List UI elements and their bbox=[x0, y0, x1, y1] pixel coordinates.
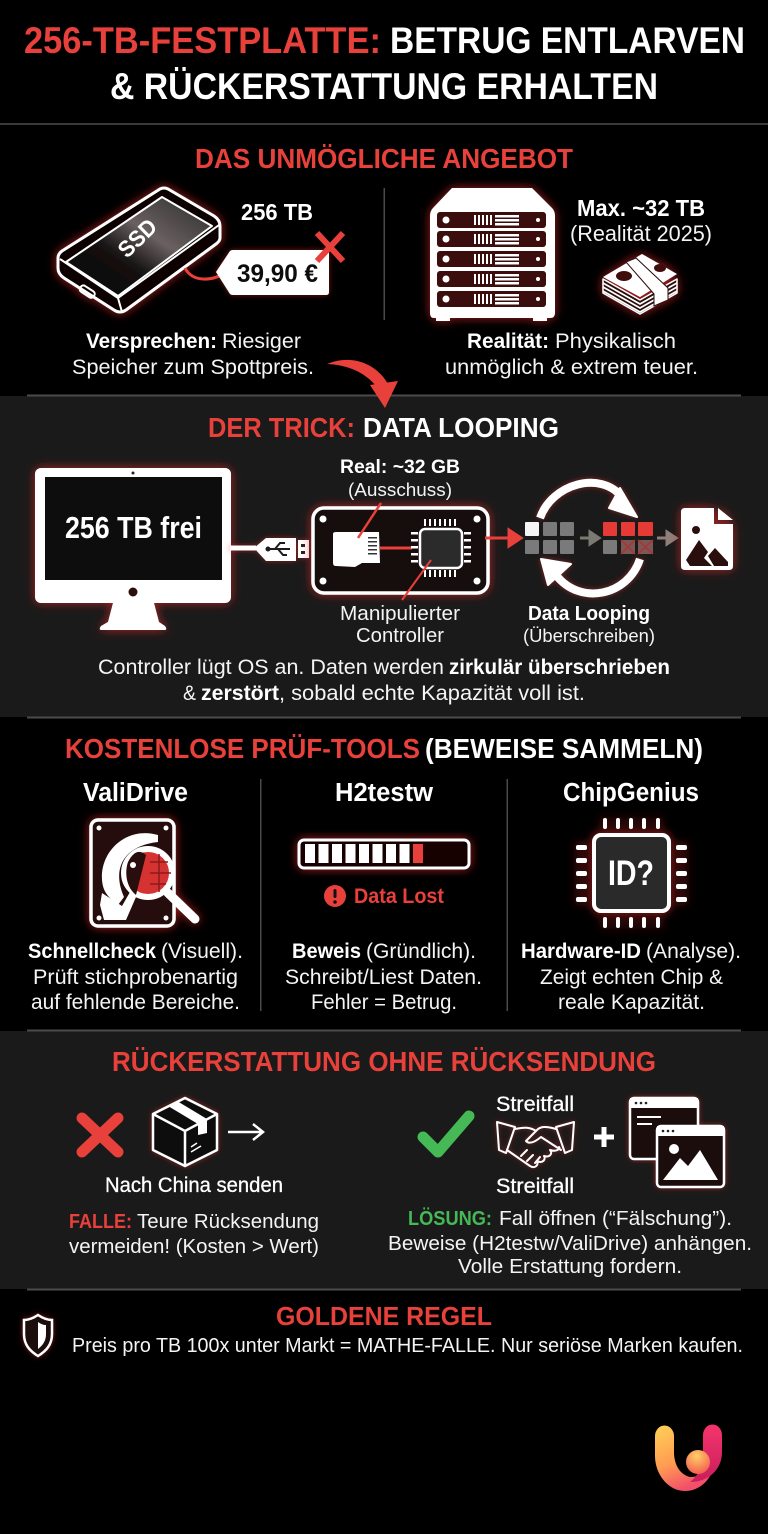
tool description: Schreibt/Liest Daten. bbox=[285, 965, 482, 989]
icon: USB plug bbox=[230, 538, 309, 561]
label: Data Looping: Data Looping bbox=[528, 602, 650, 625]
panel: das unmögliche Angebot bbox=[58, 143, 712, 379]
panel: Rückerstattung bbox=[0, 1030, 768, 1289]
label: ID: ID? bbox=[608, 854, 654, 893]
text: Falle bbox=[69, 1210, 319, 1258]
icon: chip with ID bbox=[576, 818, 687, 928]
price tag: 39,90 € bbox=[237, 260, 318, 288]
icon: SSD drive bbox=[58, 188, 220, 312]
heading: Prüf-Tools: (BEWEISE SAMMELN) bbox=[425, 733, 703, 764]
icon: warning bbox=[324, 885, 346, 907]
text: Lösung: Beweise (H2testw/ValiDrive) anhängen. bbox=[388, 1232, 752, 1255]
logo bbox=[655, 1424, 722, 1491]
text: explanation bbox=[98, 655, 670, 705]
tool: ChipGenius bbox=[521, 779, 741, 1014]
icon: monitor bbox=[35, 468, 231, 630]
title bbox=[24, 20, 745, 107]
data blocks: overwritten bbox=[603, 522, 653, 554]
label: Streitfall bottom: Streitfall bbox=[496, 1175, 574, 1198]
icon: SSD drive: SSD bbox=[112, 213, 162, 263]
text: Realität bbox=[445, 329, 698, 379]
tool description: Schnellcheck bbox=[28, 939, 156, 963]
tool description: (Gründlich). bbox=[366, 939, 476, 963]
label: manipulierter Controller: Controller bbox=[356, 624, 444, 647]
tool name: ValiDrive bbox=[83, 779, 188, 807]
red curved arrow bbox=[327, 360, 398, 408]
tool description: Hardware-ID bbox=[521, 939, 641, 963]
text: explanation: zerstört bbox=[201, 681, 279, 705]
label: Streitfall top: Streitfall bbox=[496, 1093, 574, 1116]
icon: corrupted image file bbox=[681, 508, 733, 570]
title: & RÜCKERSTATTUNG ERHALTEN bbox=[110, 66, 658, 107]
label: manipulierter Controller: Manipulierter bbox=[340, 602, 460, 625]
label: data lost: Data Lost bbox=[354, 884, 444, 908]
icon: plus bbox=[594, 1127, 614, 1147]
arrow: gray between blocks bbox=[580, 532, 599, 544]
text: Versprechen: Speicher zum Spottpreis. bbox=[72, 355, 314, 379]
heading: Rückerstattung: RÜCKERSTATTUNG OHNE RÜCKSENDUNG bbox=[112, 1046, 656, 1077]
tool description: (Visuell). bbox=[161, 939, 243, 963]
label: nach China senden: Nach China senden bbox=[105, 1174, 283, 1197]
label: 256 TB: 256 TB bbox=[241, 199, 313, 225]
icon: hard drive with magnifier bbox=[91, 820, 195, 926]
progress bar bbox=[299, 840, 469, 868]
heading: Prüf-Tools: KOSTENLOSE PRÜF-TOOLS bbox=[65, 733, 420, 764]
arrow: board to data blocks bbox=[485, 530, 521, 546]
icon: red cross bbox=[82, 1118, 118, 1152]
label: max 32 TB: Max. ~32 TB bbox=[577, 195, 705, 221]
tool: H2testw bbox=[285, 779, 482, 1014]
text: Falle: vermeiden! (Kosten > Wert) bbox=[69, 1235, 319, 1258]
tool description: Zeigt echten Chip & bbox=[540, 965, 723, 989]
arrow: send bbox=[228, 1124, 263, 1140]
text: Versprechen: Versprechen: bbox=[86, 329, 217, 353]
text: Realität: Realität: bbox=[467, 329, 549, 353]
text: Falle: Teure Rücksendung bbox=[137, 1210, 319, 1233]
text: Versprechen: Riesiger bbox=[222, 329, 301, 353]
panel: goldene Regel bbox=[24, 1288, 743, 1357]
icon: tag string bbox=[185, 268, 226, 279]
text: Realität: unmöglich & extrem teuer. bbox=[445, 355, 698, 379]
heading: der Trick: DATA LOOPING bbox=[363, 412, 559, 443]
label: manipulierter Controller bbox=[340, 602, 460, 647]
text: Lösung bbox=[388, 1207, 752, 1278]
icon: circuit board bbox=[313, 508, 488, 593]
text: Lösung: Fall öffnen (“Fälschung”). bbox=[499, 1207, 732, 1230]
icon: red cross on price bbox=[317, 233, 343, 261]
heading: goldene Regel: GOLDENE REGEL bbox=[276, 1301, 492, 1331]
tool description: Fehler = Betrug. bbox=[311, 990, 457, 1014]
text: Lösung: LÖSUNG: bbox=[408, 1207, 492, 1230]
heading: Prüf-Tools bbox=[65, 733, 703, 764]
text: explanation: zirkulär überschrieben bbox=[449, 655, 670, 679]
text: Falle: FALLE: bbox=[69, 1210, 132, 1233]
heading: das unmögliche Angebot: DAS UNMÖGLICHE ANGEBOT bbox=[195, 143, 573, 174]
tool name: ChipGenius bbox=[563, 779, 699, 807]
icon: handshake bbox=[497, 1122, 574, 1167]
text: goldene Regel: Preis pro TB 100x unter Markt = MATHE-FALLE. Nur seriöse Marken kaufen. bbox=[72, 1334, 743, 1357]
panel: Prüf-Tools bbox=[27, 716, 741, 1014]
text: explanation: Controller lügt OS an. Daten werden bbox=[98, 655, 444, 679]
tool description: Prüft stichprobenartig bbox=[33, 965, 238, 989]
panel: der Trick bbox=[0, 394, 768, 717]
tool description: Beweis bbox=[292, 939, 361, 963]
icon: controller chip bbox=[411, 519, 471, 577]
heading: der Trick: DER TRICK: bbox=[208, 412, 355, 443]
label: Ausschuss: (Ausschuss) bbox=[348, 479, 452, 500]
heading: der Trick bbox=[208, 412, 559, 443]
label: Realität 2025: (Realität 2025) bbox=[570, 221, 712, 246]
tool description: (Analyse). bbox=[646, 939, 741, 963]
tool description bbox=[285, 939, 482, 1014]
tool description: reale Kapazität. bbox=[558, 990, 705, 1014]
label: Real 32 GB: Real: ~32 GB bbox=[340, 456, 460, 478]
label: 256 TB frei: 256 TB frei bbox=[65, 510, 202, 545]
label: Überschreiben: (Überschreiben) bbox=[523, 625, 655, 646]
tool: ValiDrive bbox=[28, 779, 243, 1014]
text: Lösung: Volle Erstattung fordern. bbox=[458, 1255, 682, 1278]
icon: stack of money bbox=[603, 254, 677, 314]
tool description: auf fehlende Bereiche. bbox=[31, 990, 240, 1014]
icon: server rack bbox=[430, 188, 555, 321]
icon: looping arrows bbox=[540, 483, 640, 593]
tool description bbox=[521, 939, 741, 1014]
data blocks: before bbox=[525, 522, 574, 554]
tool description bbox=[28, 939, 243, 1014]
arrow: to corrupted file bbox=[657, 532, 676, 544]
text: explanation: & bbox=[183, 681, 196, 705]
icon: shield bbox=[24, 1315, 52, 1356]
tool name: H2testw bbox=[335, 779, 433, 807]
leader line: real capacity bbox=[358, 503, 381, 538]
icon: microSD card bbox=[333, 532, 380, 567]
text: Realität: Physikalisch bbox=[555, 329, 676, 353]
text: explanation: , sobald echte Kapazität voll ist. bbox=[279, 681, 585, 705]
text: Versprechen bbox=[72, 329, 314, 379]
icon: green check bbox=[423, 1116, 469, 1152]
price tag bbox=[216, 250, 329, 295]
title: 256-TB-FESTPLATTE: bbox=[24, 20, 381, 61]
icon: package bbox=[153, 1098, 217, 1166]
leader line: controller bbox=[402, 560, 431, 600]
icon: screenshot windows bbox=[630, 1098, 724, 1187]
